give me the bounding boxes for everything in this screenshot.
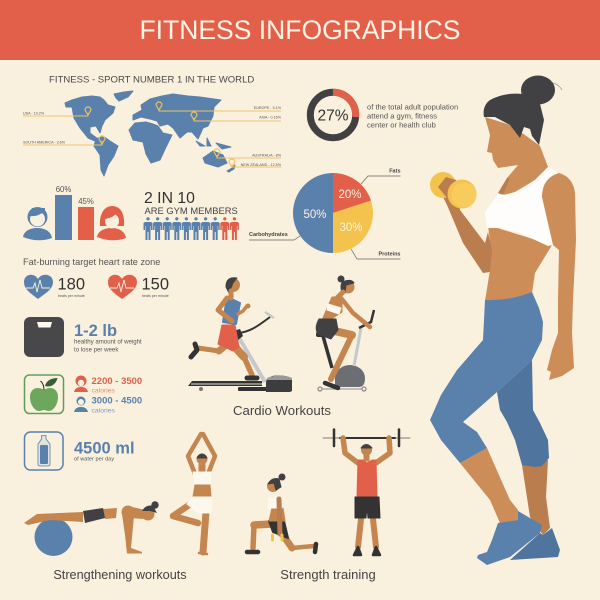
icon: scale	[24, 317, 64, 357]
heart rate: 150	[108, 275, 169, 299]
head and neck	[485, 117, 548, 195]
map labels: ASIA - 0.16%	[259, 116, 282, 120]
back arm	[542, 173, 576, 380]
runner figure	[191, 278, 257, 378]
exercise bike	[316, 310, 374, 391]
gender bar chart: 45%	[78, 197, 94, 206]
map pins	[85, 102, 235, 167]
map labels	[23, 106, 282, 167]
icon: man	[23, 207, 52, 240]
stat: 2 in 10 gym members: ARE GYM MEMBERS	[144, 205, 238, 216]
stat: calories: 2200 - 3500	[92, 376, 142, 387]
front arm	[438, 177, 492, 273]
people pictogram row	[144, 217, 220, 240]
pie chart: nutrition: Fats	[389, 168, 400, 174]
heart rate heading: Fat-burning target heart rate zone	[23, 257, 160, 267]
icon: water bottle	[24, 432, 63, 470]
heart rate: 150: beats per minute	[142, 294, 169, 298]
strengthening: yoga tree pose	[173, 434, 215, 554]
strength: man with barbell	[323, 430, 410, 555]
donut caption: of the total adult population	[367, 102, 458, 112]
back legging	[497, 360, 549, 467]
title: FITNESS INFOGRAPHICS	[140, 15, 460, 45]
icon: man small	[74, 396, 88, 412]
stat: calories	[74, 376, 142, 414]
map labels: NEW ZEALAND - 12.5%	[241, 163, 282, 167]
map labels: EUROPE - 5.1%	[254, 106, 282, 110]
back calf	[522, 460, 550, 535]
heart rate: 180: beats per minute	[58, 294, 85, 298]
stat: calories: 3000 - 4500	[92, 396, 142, 406]
caption: cardio: Cardio Workouts	[233, 403, 331, 418]
strength: lunge with dumbbells	[247, 474, 316, 552]
pie chart: nutrition	[249, 168, 400, 259]
pie chart: nutrition: Carbohydrates	[249, 232, 288, 238]
map labels: USA - 10.2%	[23, 112, 45, 116]
stat: 2 in 10 gym members: 2 IN 10	[144, 190, 195, 207]
cardio: runner on treadmill	[188, 278, 292, 392]
front calf	[460, 448, 518, 523]
heart rate: 150: 150	[142, 276, 169, 294]
barbell	[323, 437, 410, 439]
icon: dumbbell	[430, 172, 476, 208]
stat: weight loss	[74, 322, 142, 354]
back shoe	[510, 528, 560, 560]
stat: weight loss: healthy amount of weight	[74, 338, 142, 346]
donut chart: 27%	[310, 92, 356, 138]
pie chart: nutrition: 50%	[303, 209, 327, 221]
donut caption	[367, 102, 458, 130]
map labels: SOUTH AMERICA - 3.6%	[23, 140, 66, 144]
heart rate: 180	[24, 275, 85, 299]
donut caption: center or health club	[367, 120, 436, 130]
caption: strengthening: Strengthening workouts	[53, 568, 187, 582]
hair	[484, 94, 544, 145]
stat: water: 4500 ml	[74, 440, 135, 458]
plank figure	[24, 501, 159, 554]
pie chart: nutrition: 20%	[338, 189, 362, 201]
stat: water: of water per day	[74, 456, 114, 462]
front shoe	[477, 511, 542, 565]
panel: world map	[23, 74, 282, 176]
icon: exercise ball	[34, 518, 72, 556]
main figure: woman with dumbbell	[430, 76, 576, 565]
continents	[65, 91, 235, 176]
header banner	[0, 0, 600, 60]
donut chart: 27%: 27%	[317, 108, 349, 124]
pie callouts	[249, 176, 400, 259]
gender bar chart: 60%	[56, 185, 71, 194]
strengthening: plank on ball	[24, 501, 159, 556]
torso	[485, 225, 552, 301]
treadmill	[188, 312, 292, 392]
stat: calories: calories	[92, 408, 116, 414]
icon: woman	[97, 206, 126, 240]
stat: calories: calories	[92, 388, 116, 394]
map labels: AUSTRALIA - 8%	[252, 154, 282, 158]
sports bra	[485, 167, 558, 246]
gender bar chart	[23, 185, 126, 240]
cardio: woman on exercise bike	[316, 276, 374, 391]
caption: strength: Strength training	[280, 567, 376, 582]
donut caption: attend a gym, fitness	[367, 112, 437, 120]
heart rate: 180: 180	[58, 276, 85, 294]
pie chart: nutrition: Proteins	[378, 252, 400, 258]
icon: woman small	[74, 376, 88, 392]
stat: 2 in 10 gym members	[144, 190, 239, 240]
cyclist figure	[316, 276, 370, 388]
map heading: FITNESS - SPORT NUMBER 1 IN THE WORLD	[49, 74, 254, 86]
front leggings	[430, 292, 543, 463]
stat: weight loss: to lose per week	[74, 346, 119, 354]
map leader lines	[23, 109, 281, 167]
icon: apple	[24, 375, 64, 414]
icon: dumbbell	[272, 535, 282, 540]
pie chart: nutrition: 30%	[339, 222, 363, 234]
stat: weight loss: 1-2 lb	[74, 322, 117, 340]
